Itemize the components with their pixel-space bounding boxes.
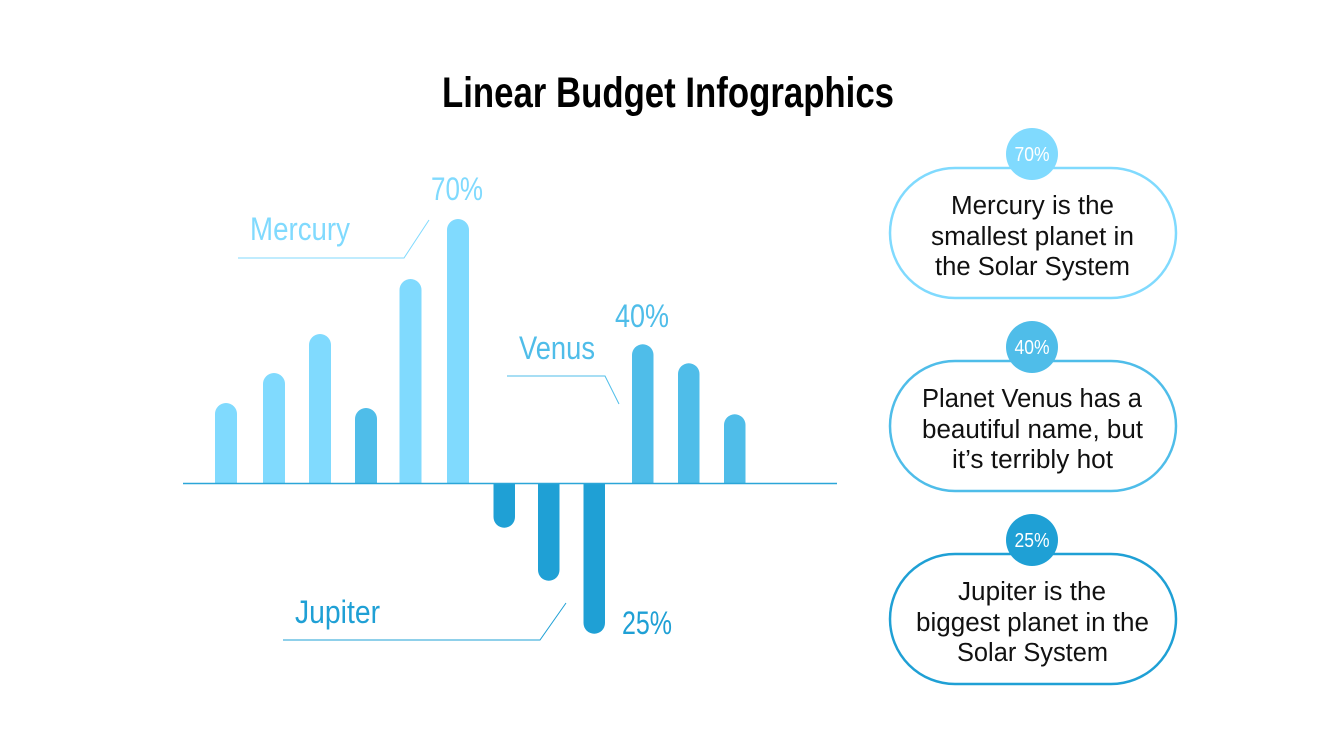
badge: 25%: 25% (1014, 530, 1050, 552)
text: Venus description: Planet Venus has a (922, 385, 1143, 413)
text: Venus description: beautiful name, but (922, 416, 1143, 444)
bar chart (183, 219, 837, 634)
badge: 25% (1006, 514, 1058, 566)
text: Mercury description: the Solar System (935, 253, 1130, 281)
text: Jupiter description: Solar System (957, 639, 1108, 667)
badge: 70% (1006, 128, 1058, 180)
text: Jupiter description: biggest planet in the (916, 609, 1149, 637)
label: Venus (507, 330, 619, 404)
text: Mercury description: smallest planet in (931, 223, 1134, 251)
panel: Mercury card (890, 128, 1176, 298)
label: Jupiter: Jupiter (295, 594, 380, 630)
value: Mercury 70%: 70% (431, 171, 483, 207)
bars: Jupiter (494, 484, 605, 634)
bars: Mercury (215, 219, 469, 483)
text: Jupiter description: Jupiter is the (958, 578, 1106, 606)
label: Mercury: Mercury (250, 211, 350, 247)
title: Linear Budget Infographics (442, 69, 894, 117)
bars: Venus (355, 344, 746, 483)
badge: 40% (1006, 321, 1058, 373)
label: Mercury (238, 211, 429, 258)
label: Venus: Venus (519, 330, 595, 366)
badge: 70%: 70% (1014, 144, 1050, 166)
badge: 40%: 40% (1014, 337, 1050, 359)
value: Jupiter 25%: 25% (622, 605, 672, 641)
text: Venus description: it’s terribly hot (952, 446, 1113, 474)
panel: Venus card (890, 321, 1176, 491)
panel: Jupiter card (890, 514, 1176, 684)
baseline (183, 482, 837, 484)
value: Venus 40%: 40% (615, 298, 669, 334)
label: Jupiter (283, 594, 566, 640)
text: Mercury description: Mercury is the (951, 192, 1114, 220)
